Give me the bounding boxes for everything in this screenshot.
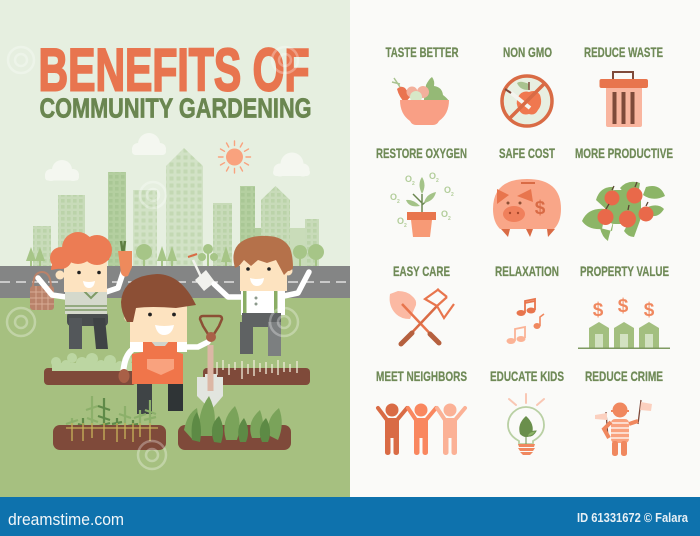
grass lawn — [0, 298, 350, 497]
carrot — [118, 241, 132, 277]
icon: potted plant with oxygen: O — [444, 185, 451, 195]
label: reduce crime: REDUCE CRIME — [585, 368, 663, 384]
label: reduce waste: REDUCE WASTE — [584, 44, 663, 60]
label: meet neighbors: MEET NEIGHBORS — [376, 368, 467, 384]
bed: top left — [44, 353, 136, 385]
icon: potted plant with oxygen: 2 — [404, 223, 407, 229]
shovel — [197, 316, 223, 410]
icon: potted plant with oxygen: O — [397, 216, 404, 226]
trees — [26, 244, 324, 267]
icon: potted plant with oxygen: O — [405, 174, 412, 184]
bed: bottom right — [178, 396, 291, 450]
vegetable beds — [44, 274, 310, 450]
hair — [50, 232, 112, 270]
basket — [30, 272, 54, 310]
label: taste better: TASTE BETTER — [386, 44, 458, 60]
person: left with carrot and basket — [30, 232, 132, 349]
watering can — [188, 254, 215, 291]
icon: no GMO apple — [502, 76, 552, 126]
icon: potted plant with oxygen: 2 — [448, 216, 451, 222]
person: right with watering can — [188, 236, 309, 356]
panel: left background — [0, 0, 350, 497]
label: restore oxygen: RESTORE OXYGEN — [376, 145, 467, 161]
icon: potted plant with oxygen: 2 — [451, 192, 454, 198]
icon: trash can — [600, 72, 648, 127]
bed: bottom left — [53, 396, 166, 450]
label: relaxation: RELAXATION — [495, 263, 559, 279]
person: centre gardener — [118, 274, 223, 414]
clouds — [45, 133, 310, 181]
label: non gmo: NON GMO — [503, 44, 552, 60]
icon: houses with dollar signs: $ — [618, 296, 629, 317]
heading: community gardening: COMMUNITY GARDENING — [40, 92, 312, 124]
city skyline — [33, 148, 319, 266]
label: easy care: EASY CARE — [393, 263, 450, 279]
icon: potted plant with oxygen: 2 — [397, 199, 400, 205]
icon: houses with dollar signs — [578, 296, 670, 349]
icon: light bulb with leaf — [508, 394, 544, 455]
icon: potted plant with oxygen: 2 — [436, 178, 439, 184]
icon: piggy bank: $ — [535, 198, 546, 219]
icon: shovel and fork — [390, 289, 454, 344]
watermark spirals — [7, 47, 298, 469]
icon: potted plant with oxygen: 2 — [412, 181, 415, 187]
sun — [218, 141, 250, 173]
heading: benefits of: BENEFITS OF — [38, 36, 310, 104]
icon: houses with dollar signs: $ — [644, 300, 655, 321]
icon: group of people — [378, 404, 465, 455]
bed: top right — [203, 360, 310, 385]
footer bar — [0, 497, 700, 536]
icon: potted plant with oxygen: O — [390, 192, 397, 202]
icon: potted plant with oxygen — [390, 171, 454, 237]
icon: tomato plant — [582, 182, 665, 241]
label: educate kids: EDUCATE KIDS — [490, 368, 564, 384]
road — [0, 266, 350, 298]
icon: potted plant with oxygen: O — [429, 171, 436, 181]
footer logo: dreamstime.com — [8, 510, 124, 529]
label: safe cost: SAFE COST — [499, 145, 555, 161]
icon: salad bowl — [392, 77, 449, 125]
icon: music notes — [506, 299, 544, 344]
icon: houses with dollar signs: $ — [593, 300, 604, 321]
icon: crossing guard — [595, 400, 652, 456]
title — [38, 36, 312, 124]
panel: right background — [350, 0, 700, 497]
icon: potted plant with oxygen: O — [441, 209, 448, 219]
icon: piggy bank — [493, 179, 561, 237]
